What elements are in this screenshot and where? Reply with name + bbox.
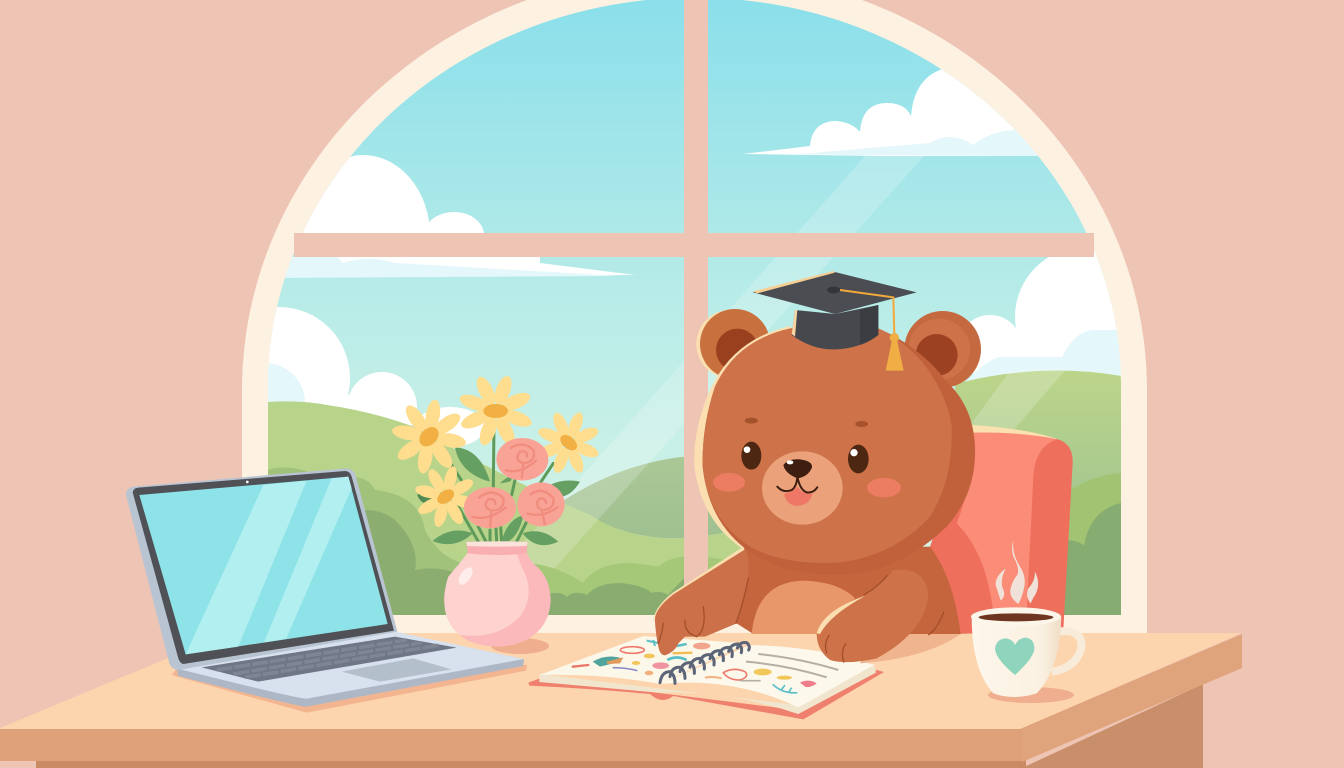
left page (539, 636, 747, 684)
chair (930, 425, 1073, 634)
vase neck (466, 541, 528, 555)
nose (783, 459, 812, 478)
mug heart (995, 638, 1034, 675)
daisy lower (407, 458, 484, 535)
cap base (792, 305, 878, 349)
mug rim (971, 607, 1061, 626)
rose left (464, 487, 516, 528)
eyes (741, 442, 869, 473)
right meadow (1068, 473, 1121, 546)
hand shadow on desk (860, 633, 962, 663)
chair light panel (957, 432, 1057, 613)
tongue (784, 487, 813, 506)
head shadow (703, 326, 975, 575)
right arm rim (817, 596, 865, 634)
cap base rim (792, 310, 797, 337)
cap board (753, 272, 917, 314)
head (703, 326, 952, 563)
book cover (528, 670, 884, 719)
upper left cloud (296, 155, 484, 235)
daisy left (386, 393, 472, 480)
light bushes center (534, 556, 723, 597)
chair rim (972, 425, 1058, 439)
desk front (0, 728, 1022, 761)
belly (752, 581, 857, 634)
mouth (777, 477, 817, 492)
page doodles (573, 640, 838, 693)
steam (996, 540, 1038, 604)
desk (0, 633, 1242, 768)
window mullions (294, 0, 1094, 600)
arm highlight rim (653, 547, 745, 622)
coffee (979, 613, 1053, 621)
spiral binding (660, 643, 749, 683)
open sketchbook (528, 636, 884, 719)
nose highlight (787, 460, 793, 464)
rose top (496, 438, 548, 481)
sky (268, 0, 1118, 547)
sunlight rays (524, 156, 924, 568)
tassel (886, 333, 904, 371)
camera (246, 481, 249, 483)
daisy right (526, 401, 610, 485)
laptop lid (126, 468, 397, 670)
mug handle (1052, 631, 1082, 672)
graduation cap (753, 271, 917, 371)
muzzle (762, 451, 843, 525)
cap button (827, 287, 840, 293)
vase shadow (491, 638, 549, 654)
coffee cup shadow (988, 687, 1074, 703)
vase light area (445, 553, 529, 636)
cheeks (713, 473, 901, 497)
laptop (126, 468, 527, 713)
chair dark back (930, 432, 1073, 634)
right hill (955, 370, 1121, 490)
right hill ray (972, 370, 1064, 429)
flowers and vase (386, 363, 610, 647)
window sill (268, 615, 1121, 634)
touchpad (342, 658, 452, 682)
desk underside (36, 760, 1026, 768)
left arm (655, 549, 749, 655)
screen reflections (186, 477, 352, 654)
right page (660, 645, 874, 707)
page edges (539, 664, 876, 714)
cap board edge (753, 271, 835, 293)
left ear (696, 309, 770, 379)
dark bushes center (548, 578, 684, 615)
upper right cloud (744, 70, 1038, 156)
keyboard (202, 637, 457, 682)
vase highlight (456, 565, 475, 587)
window frame (242, 0, 1147, 634)
daisy top (447, 363, 544, 458)
hill left (268, 401, 619, 530)
cap base shading (860, 305, 878, 345)
desk leg (1022, 684, 1203, 768)
mug body (972, 617, 1061, 697)
rose right (517, 482, 565, 526)
eyebrows (745, 418, 868, 427)
vase body (444, 546, 551, 647)
cloud streak left (268, 257, 635, 278)
laptop base edge (177, 659, 524, 707)
head rim (694, 326, 793, 549)
lower right cloud (966, 250, 1121, 382)
left hand creases (658, 578, 748, 643)
window view (268, 0, 1121, 615)
hill middle (564, 456, 724, 538)
lower left cloud (268, 307, 484, 446)
arched window (208, 0, 1155, 640)
right ear (904, 311, 981, 388)
right forearm (817, 570, 928, 662)
coffee mug (971, 540, 1082, 697)
tassel cord (840, 290, 894, 335)
dark bush left (365, 510, 452, 615)
right arm creases (825, 575, 944, 663)
laptop screen (139, 477, 388, 654)
laptop bezel (133, 471, 394, 664)
laptop base top (177, 632, 524, 699)
stems (448, 423, 553, 542)
leaves (417, 447, 580, 545)
light bush left (268, 468, 460, 572)
vase rim (466, 541, 528, 547)
armchair and bear (653, 271, 1073, 663)
meadow (564, 504, 745, 560)
bear body (673, 547, 961, 634)
laptop shadow (172, 665, 527, 713)
desk top (0, 633, 1242, 729)
dark bush right (1060, 503, 1121, 615)
desk side (1020, 634, 1242, 762)
